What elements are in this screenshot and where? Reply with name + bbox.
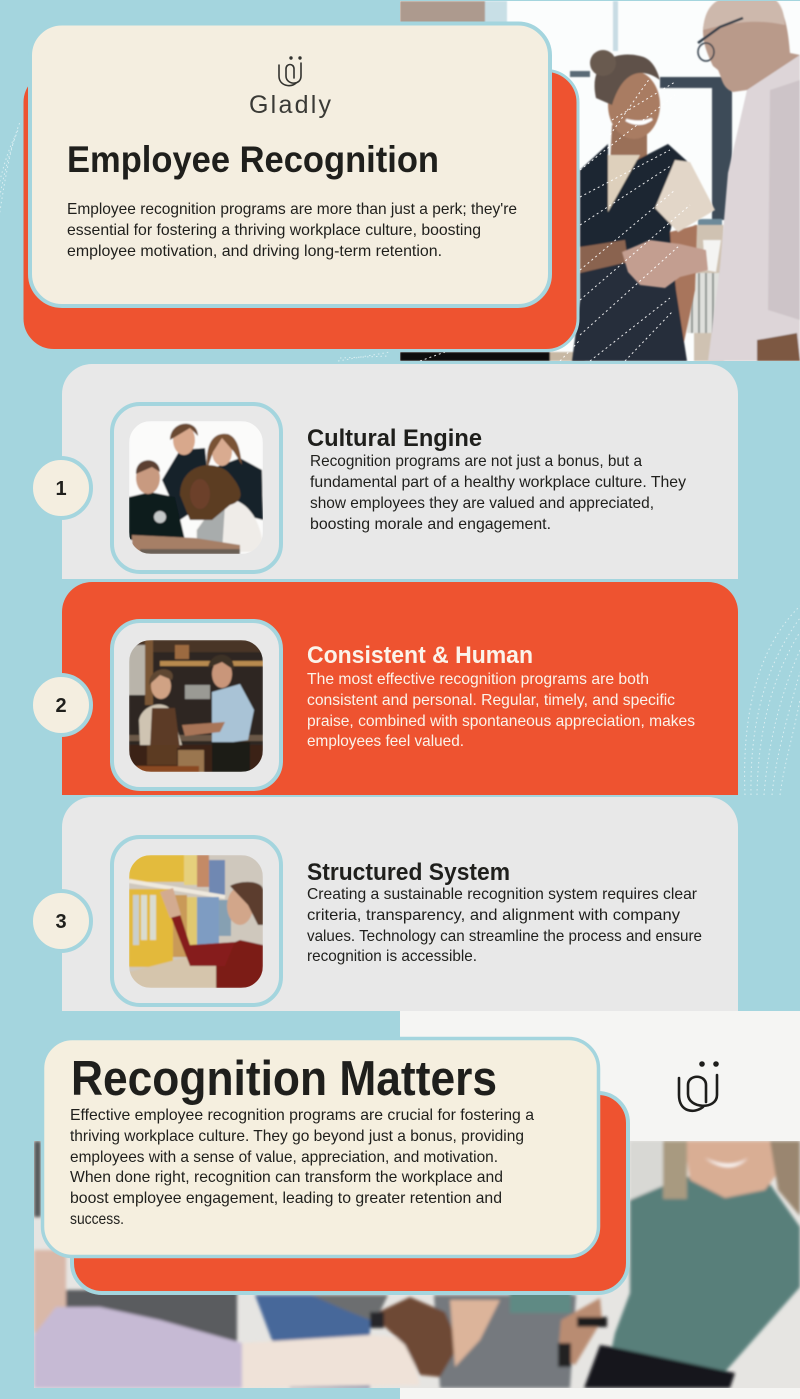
- number badge 3: 3: [55, 911, 67, 933]
- panel: step 2: [31, 582, 738, 795]
- description: consistent and personal. Regular, timely, and specific: [307, 692, 675, 709]
- photo frame: team at a laptop: [112, 404, 281, 572]
- panel: orange backing card (top): [22, 70, 578, 350]
- conclusion text: thriving workplace culture. They go beyond just a bonus, providing: [70, 1128, 524, 1145]
- panel: off-white corner block: [400, 1011, 800, 1399]
- description: [307, 886, 702, 965]
- heading: Structured System: [307, 859, 510, 886]
- panel: intro card: [30, 24, 550, 306]
- conclusion text: boost employee engagement, leading to greater retention and: [70, 1190, 502, 1207]
- heading: Recognition Matters: [71, 1052, 497, 1106]
- number badge 3: [31, 891, 91, 951]
- man: [622, 0, 800, 361]
- description: praise, combined with spontaneous appreciation, makes: [307, 713, 695, 730]
- intro text: essential for fostering a thriving workplace culture, boosting: [67, 222, 481, 239]
- panel: orange backing card (bottom): [72, 1093, 628, 1293]
- row background: [62, 582, 738, 795]
- icon: Gladly logo mark (large): [679, 1062, 718, 1111]
- decorative dots: [0, 122, 800, 795]
- number badge 1: [31, 458, 91, 518]
- photo frame: cafe workers: [112, 621, 281, 789]
- description: boosting morale and engagement.: [310, 516, 551, 533]
- title: Employee Recognition: [67, 139, 439, 180]
- photo frame: woman at binder shelf: [112, 837, 281, 1005]
- intro text: employee motivation, and driving long-term retention.: [67, 243, 442, 260]
- heading: Cultural Engine: [307, 425, 482, 452]
- card background: [30, 24, 550, 306]
- conclusion text: Effective employee recognition programs are crucial for fostering a: [70, 1107, 534, 1124]
- conclusion text: employees with a sense of value, appreciation, and motivation.: [70, 1149, 498, 1166]
- card background: [42, 1038, 598, 1256]
- panel: step 1: [31, 364, 738, 579]
- row background: [62, 364, 738, 579]
- description: Recognition programs are not just a bonus, but a: [310, 453, 642, 470]
- description: The most effective recognition programs are both: [307, 671, 649, 688]
- logo wordmark: Gladly: [249, 91, 332, 119]
- number badge 1: 1: [55, 478, 67, 500]
- photo: colleagues shaking hands: [400, 0, 800, 361]
- panel: step 3: [31, 797, 738, 1011]
- conclusion text: When done right, recognition can transform the workplace and: [70, 1169, 503, 1186]
- conclusion text: [70, 1107, 534, 1228]
- description: criteria, transparency, and alignment with company: [307, 907, 680, 924]
- intro text: Employee recognition programs are more than just a perk; they're: [67, 201, 517, 218]
- woman: [572, 50, 715, 361]
- description: fundamental part of a healthy workplace culture. They: [310, 474, 686, 491]
- description: [310, 453, 686, 533]
- number badge 2: [31, 675, 91, 735]
- row background: [62, 797, 738, 1011]
- description: recognition is accessible.: [307, 948, 477, 965]
- dashed white diagonals: [420, 78, 690, 361]
- icon: Gladly logo: [279, 57, 301, 86]
- description: values. Technology can streamline the process and ensure: [307, 928, 702, 945]
- conclusion text: success.: [70, 1211, 124, 1228]
- description: show employees they are valued and appreciated,: [310, 495, 654, 512]
- photo: team stacking hands: [34, 1141, 800, 1388]
- description: [307, 671, 695, 750]
- description: Creating a sustainable recognition system requires clear: [307, 886, 698, 903]
- description: employees feel valued.: [307, 733, 464, 750]
- panel: conclusion card: [42, 1038, 598, 1256]
- intro text: [67, 201, 517, 260]
- heading: Consistent & Human: [307, 642, 533, 669]
- number badge 2: 2: [55, 695, 67, 717]
